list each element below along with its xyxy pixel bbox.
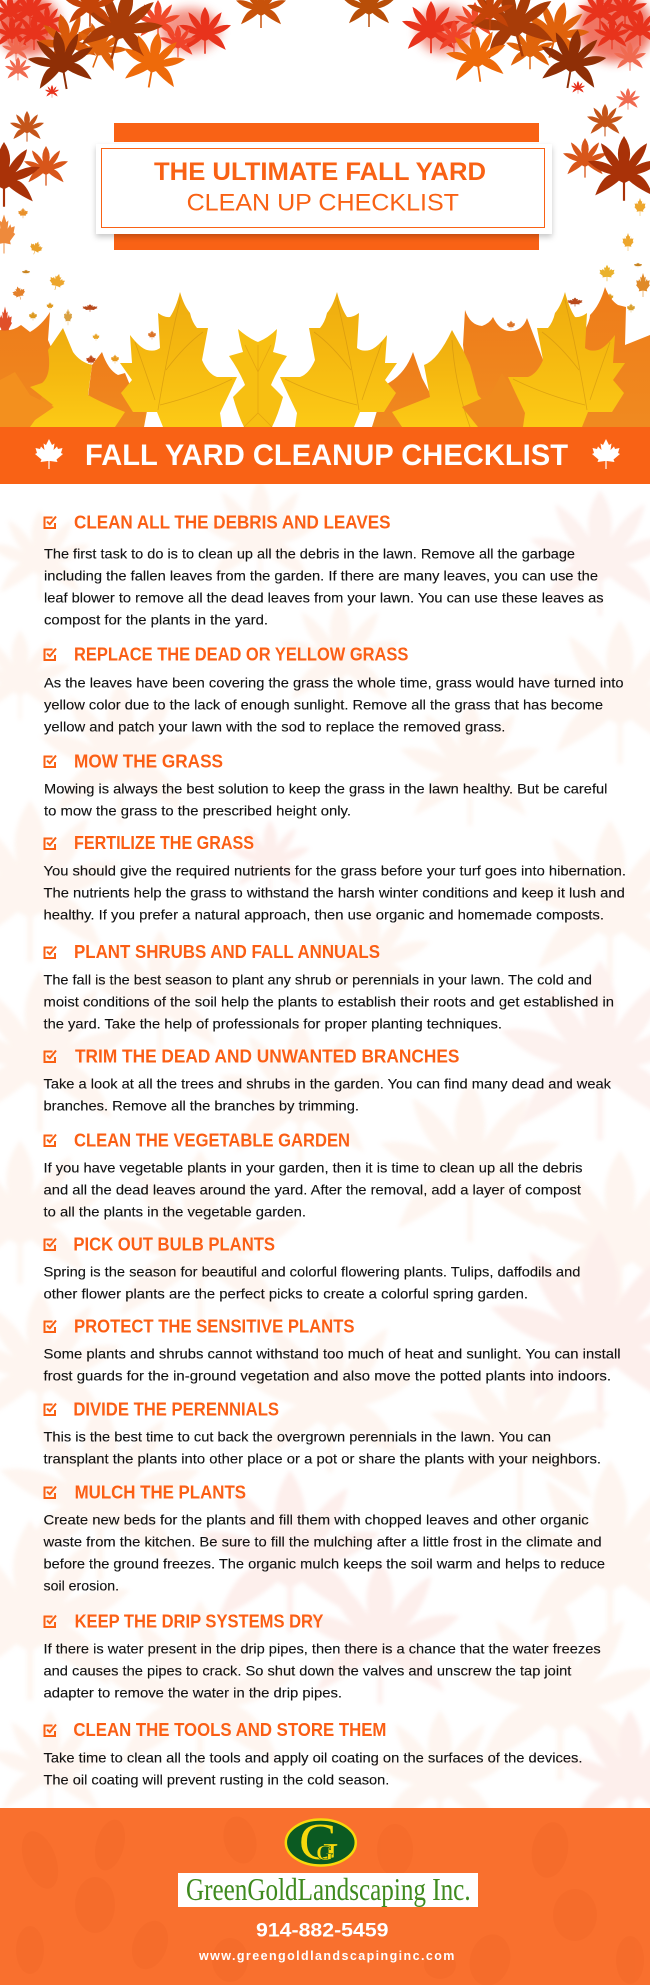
title line 1: THE ULTIMATE FALL YARD xyxy=(154,158,486,186)
large yellow leaf right xyxy=(280,292,397,427)
checklist item 1 xyxy=(44,512,604,627)
checklist item 2 xyxy=(44,644,624,734)
checklist item 4: You should give the required nutrients for the grass before your turf goes into hibernation. xyxy=(44,862,626,878)
yellow leaf, far left xyxy=(16,328,125,427)
checklist item 8 xyxy=(44,1234,580,1301)
checklist item 9 xyxy=(44,1316,621,1383)
title bottom bar xyxy=(114,234,539,250)
checklist item 10: DIVIDE THE PERENNIALS xyxy=(73,1399,279,1419)
checklist item 2: yellow color due to the lack of enough sunlight. Remove all the grass that has become xyxy=(44,696,603,712)
checklist item 6: Take a look at all the trees and shrubs in the garden. You can find many dead and weak xyxy=(44,1075,612,1091)
checklist item 9: frost guards for the in-ground vegetation and also move the potted plants into indoors. xyxy=(44,1367,611,1383)
checklist item 8: Spring is the season for beautiful and colorful flowering plants. Tulips, daffodils and xyxy=(44,1263,580,1279)
title card xyxy=(96,144,552,234)
checklist item 11: waste from the kitchen. Be sure to fill the mulching after a little frost in the climate and xyxy=(42,1533,602,1549)
checklist item 11 xyxy=(42,1482,605,1593)
checklist item 1: The first task to do is to clean up all the debris in the lawn. Remove all the garbage xyxy=(44,545,575,561)
checklist item 12: KEEP THE DRIP SYSTEMS DRY xyxy=(75,1611,323,1631)
checklist item 13: The oil coating will prevent rusting in the cold season. xyxy=(44,1771,389,1787)
central leaf veins xyxy=(244,345,272,427)
golden maple leaf border xyxy=(0,287,650,427)
checklist item 11: soil erosion. xyxy=(44,1577,119,1593)
checklist item 5: The fall is the best season to plant any shrub or perennials in your lawn. The cold and xyxy=(44,971,592,987)
large yellow leaf far right xyxy=(508,292,625,427)
checklist item 12 xyxy=(44,1611,601,1700)
header leaves: top left cluster xyxy=(0,0,286,98)
checklist item 5: the yard. Take the help of professionals for proper planting techniques. xyxy=(44,1015,502,1031)
checklist item 7: If you have vegetable plants in your garden, then it is time to clean up all the debris xyxy=(44,1159,582,1175)
far right orange leaf xyxy=(580,287,650,427)
icon: maple leaf right xyxy=(592,439,620,469)
icon: maple leaf left xyxy=(35,439,63,469)
checklist item 1: leaf blower to remove all the dead leaves from your lawn. You can use these leaves as xyxy=(44,589,604,605)
falling leaves: left side xyxy=(0,111,156,365)
far right veins xyxy=(513,300,610,410)
checklist item 2: As the leaves have been covering the grass the whole time, grass would have turned into xyxy=(44,674,624,690)
checklist item 8: PICK OUT BULB PLANTS xyxy=(73,1234,275,1254)
lower translucent orange leaf xyxy=(0,372,54,427)
checklist item 12: adapter to remove the water in the drip pipes. xyxy=(44,1684,342,1700)
checklist item 7: and all the dead leaves around the yard. After the removal, add a layer of compost xyxy=(44,1181,581,1197)
checklist item 11: MULCH THE PLANTS xyxy=(75,1482,246,1502)
logo emblem xyxy=(286,1814,356,1871)
footer panel xyxy=(0,1808,650,1985)
checklist item 9: PROTECT THE SENSITIVE PLANTS xyxy=(74,1316,354,1336)
checklist item 13: CLEAN THE TOOLS AND STORE THEM xyxy=(73,1720,386,1740)
far left orange leaf xyxy=(0,312,60,427)
header leaves: top right cluster xyxy=(344,0,650,110)
yellow leaf, right of centre xyxy=(392,330,500,427)
checklist item 4: healthy. If you prefer a natural approach, then use organic and homemade composts. xyxy=(44,906,604,922)
orange leaf, left of centre xyxy=(88,352,145,427)
checklist item 4 xyxy=(44,833,626,922)
background pattern: pale maple leaves xyxy=(0,480,650,1836)
checklist item 10: This is the best time to cut back the overgrown perennials in the lawn. You can xyxy=(44,1428,551,1444)
base fill right xyxy=(372,395,650,427)
orange leaf, right of centre xyxy=(372,352,432,427)
large yellow leaf left xyxy=(120,292,237,427)
mid vein xyxy=(452,340,470,427)
logo emblem: G xyxy=(316,1840,333,1865)
banner heading: FALL YARD CLEANUP CHECKLIST xyxy=(85,439,568,472)
phone number: 914-882-5459 xyxy=(256,1920,389,1942)
leaf veins right xyxy=(285,300,382,410)
title line 2: CLEAN UP CHECKLIST xyxy=(187,190,459,217)
checklist item 3: Mowing is always the best solution to keep the grass in the lawn healthy. But be careful xyxy=(44,780,607,796)
upper orange leaf right xyxy=(463,310,545,405)
checklist item 3 xyxy=(44,751,607,818)
checklist item 1: including the fallen leaves from the garden. If there are many leaves, you can use the xyxy=(44,567,598,583)
checklist item 6: TRIM THE DEAD AND UNWANTED BRANCHES xyxy=(75,1046,459,1066)
checklist item 11: Create new beds for the plants and fill them with chopped leaves and other organic xyxy=(44,1511,589,1527)
checklist item 13 xyxy=(44,1720,582,1787)
checklist item 7: to all the plants in the vegetable garden. xyxy=(44,1203,306,1219)
logo emblem: G xyxy=(299,1814,339,1871)
base fill left xyxy=(0,395,150,427)
checklist item 3: to mow the grass to the prescribed height only. xyxy=(44,802,351,818)
checklist item 11: before the ground freezes. The organic mulch keeps the soil warm and helps to reduce xyxy=(44,1555,605,1571)
checklist item 5: moist conditions of the soil help the plants to establish their roots and get established in xyxy=(44,993,614,1009)
logo wordmark: GreenGoldLandscaping Inc. xyxy=(186,1871,471,1907)
checklist item 6: branches. Remove all the branches by trimming. xyxy=(44,1097,359,1113)
checklist item 9: Some plants and shrubs cannot withstand too much of heat and sunlight. You can install xyxy=(44,1345,621,1361)
orange leaf lower right xyxy=(462,373,525,427)
checklist item 6 xyxy=(44,1046,612,1113)
title top bar xyxy=(114,123,539,142)
checklist item 4: The nutrients help the grass to withstand the harsh winter conditions and keep it lush and xyxy=(44,884,625,900)
checklist item 4: FERTILIZE THE GRASS xyxy=(74,833,254,853)
checklist item 7 xyxy=(44,1130,582,1219)
checklist item 10: transplant the plants into other place or a pot or share the plants with your neighbors. xyxy=(44,1450,601,1466)
section banner xyxy=(0,427,650,484)
checklist item 1: CLEAN ALL THE DEBRIS AND LEAVES xyxy=(74,512,390,532)
checklist item 12: If there is water present in the drip pipes, then there is a chance that the water freezes xyxy=(44,1640,601,1656)
checklist item 12: and causes the pipes to crack. So shut down the valves and unscrew the tap joint xyxy=(44,1662,571,1678)
falling leaves: right side xyxy=(507,104,650,330)
checklist item 13: Take time to clean all the tools and apply oil coating on the surfaces of the devices. xyxy=(44,1749,582,1765)
checklist item 10 xyxy=(44,1399,601,1466)
checklist item 2: yellow and patch your lawn with the sod to replace the removed grass. xyxy=(44,718,505,734)
checklist item 1: compost for the plants in the yard. xyxy=(44,611,268,627)
footer leaf pattern xyxy=(15,1813,644,1985)
checklist item 5: PLANT SHRUBS AND FALL ANNUALS xyxy=(74,942,380,962)
leaf veins left xyxy=(135,300,232,410)
website: www.greengoldlandscapinginc.com xyxy=(198,1949,454,1963)
checklist item 2: REPLACE THE DEAD OR YELLOW GRASS xyxy=(74,644,408,664)
checklist item 5 xyxy=(44,942,614,1031)
checklist item 3: MOW THE GRASS xyxy=(74,751,223,771)
central symmetric leaf xyxy=(229,329,287,427)
checklist item 7: CLEAN THE VEGETABLE GARDEN xyxy=(74,1130,350,1150)
checklist item 8: other flower plants are the perfect picks to create a colorful spring garden. xyxy=(44,1285,528,1301)
